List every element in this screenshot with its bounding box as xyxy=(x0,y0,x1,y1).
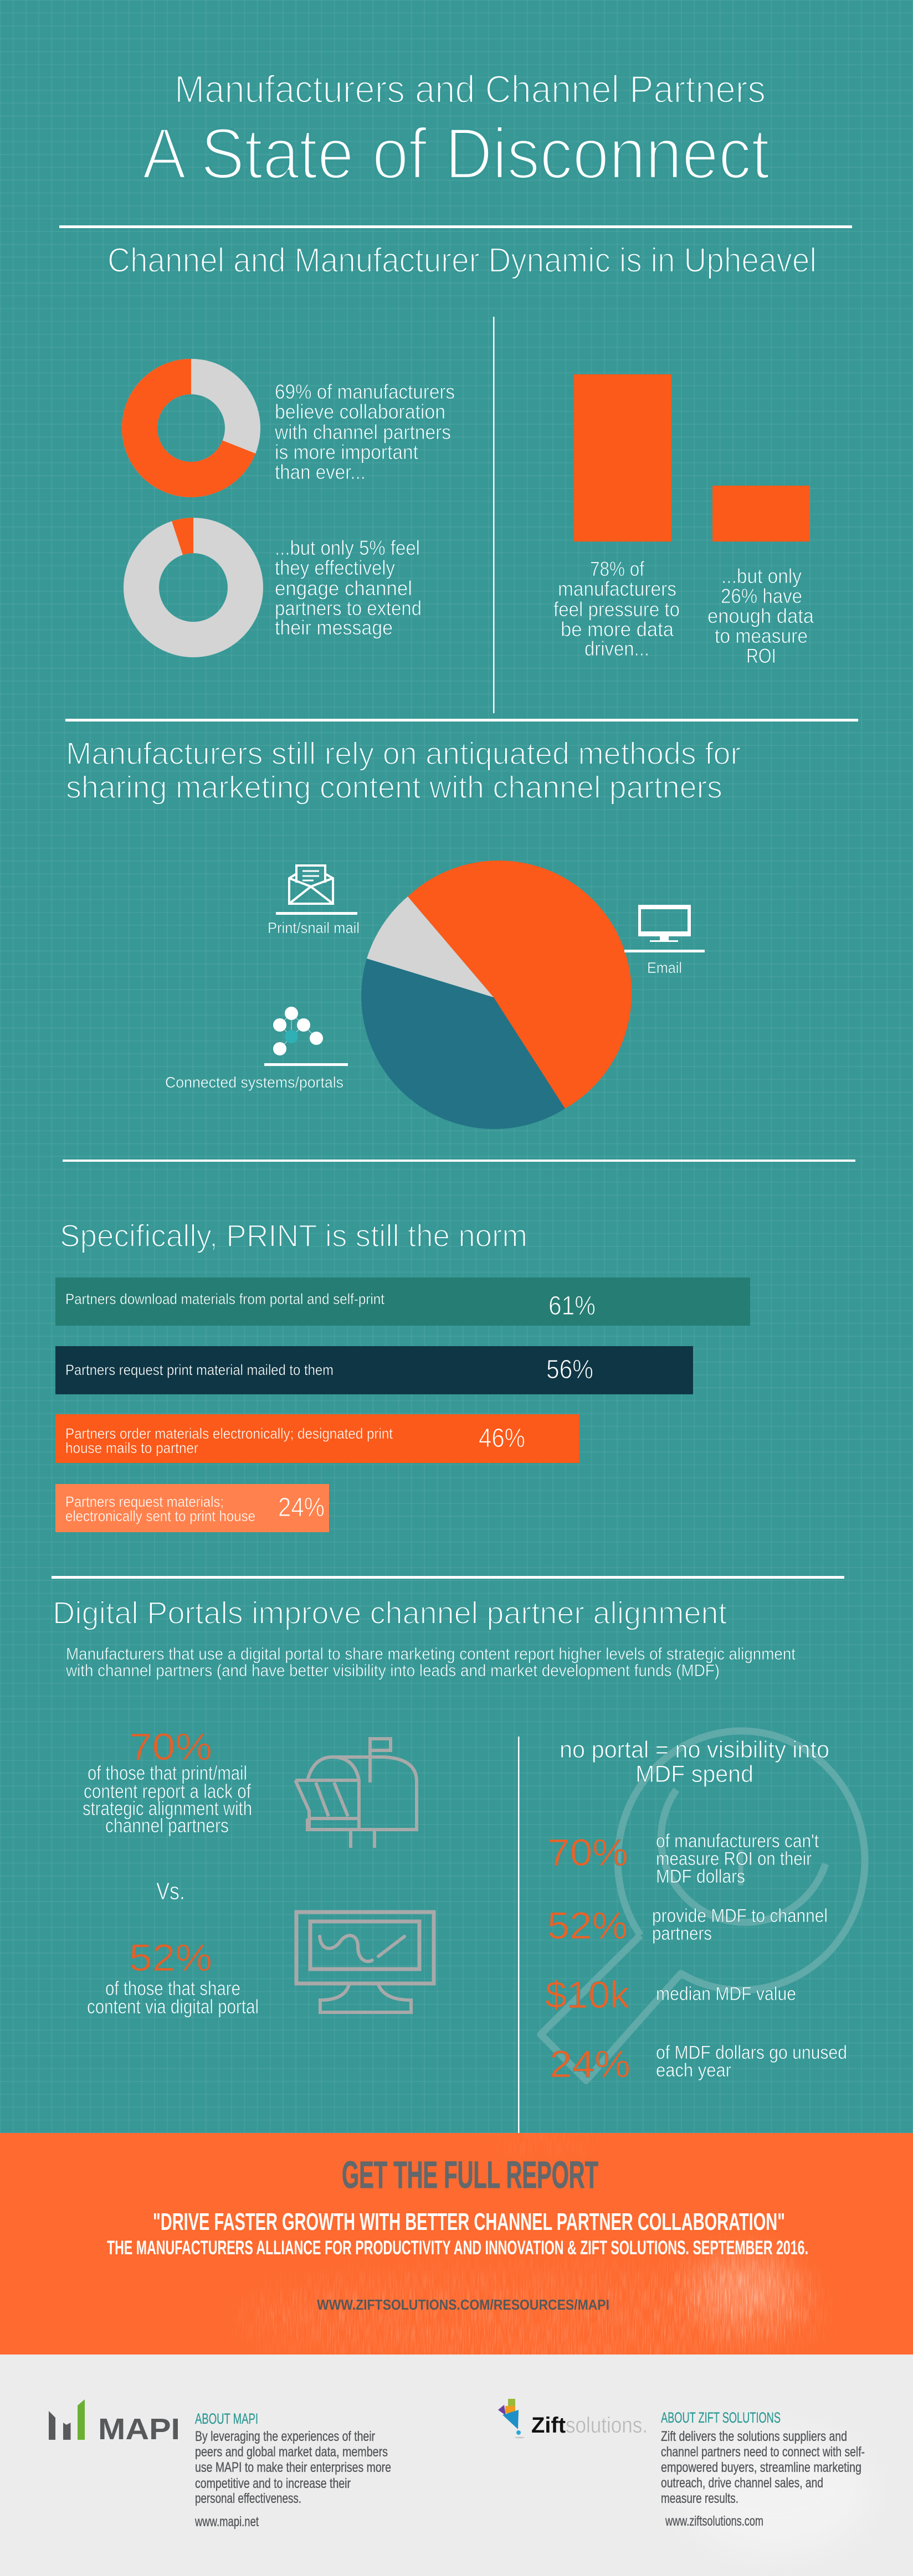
text: only 26 percent xyxy=(707,565,814,667)
text: 78 percent of manufacturers xyxy=(553,558,680,660)
text: about Zift solutions: ABOUT ZIFT SOLUTIONS xyxy=(661,2409,781,2426)
bar: print house mails 46 percent: 46% xyxy=(479,1424,525,1453)
stat: 10k median MDF: $10k xyxy=(545,1974,630,2016)
stat: 52 percent provide MDF xyxy=(547,1904,828,1947)
text: 69 percent of manufacturers: is more important xyxy=(275,441,419,463)
text: 69 percent of manufacturers xyxy=(274,380,455,483)
pie chart: content sharing methods xyxy=(361,861,632,1129)
label: print and snail mail: Print/snail mail xyxy=(268,919,360,936)
stat: 70 percent can't measure ROI: measure ROI on their xyxy=(656,1848,812,1869)
text: 78 percent of manufacturers: be more data xyxy=(561,618,674,641)
heading: no portal no visibility: MDF spend xyxy=(635,1761,753,1787)
text: only 26 percent: 26% have xyxy=(721,585,802,607)
stat: 70 percent lack alignment: strategic alignment with xyxy=(83,1797,252,1820)
intro paragraph: with channel partners (and have better visibility into leads and market development funds (MDF) xyxy=(65,1661,720,1680)
logo: MAPI: MAPI xyxy=(98,2413,180,2446)
text: about Zift solutions: Zift delivers the solutions suppliers and xyxy=(661,2429,847,2444)
text: about MAPI: competitive and to increase their xyxy=(195,2476,351,2491)
bar: sent to print house 24 percent: 24% xyxy=(278,1493,325,1522)
bar: download and self-print 61 percent xyxy=(55,1277,750,1326)
text: 69 percent of manufacturers: 69% of manufacturers xyxy=(275,380,455,403)
label: email: Email xyxy=(647,959,682,976)
stat: 52 percent digital portal: 52% xyxy=(129,1936,212,1979)
icon: desktop monitor xyxy=(638,905,691,942)
bar: print house mails 46 percent xyxy=(55,1414,579,1463)
text: about MAPI: use MAPI to make their enterprises more xyxy=(195,2460,391,2475)
text: about Zift solutions: www.ziftsolutions.com xyxy=(665,2513,763,2529)
stat: 52 percent provide MDF: 52% xyxy=(547,1904,628,1947)
heading: antiquated methods xyxy=(66,736,741,805)
text: only 5 percent: they effectively xyxy=(275,557,395,579)
text: only 5 percent: ...but only 5% feel xyxy=(275,537,420,559)
text: 78 percent of manufacturers: driven... xyxy=(584,637,649,660)
text: about MAPI: ABOUT MAPI xyxy=(195,2410,258,2427)
logo: Zift solutions: solutions. xyxy=(566,2413,648,2438)
icon: connected nodes xyxy=(273,1007,323,1055)
text: 78 percent of manufacturers: manufacturers xyxy=(558,578,676,600)
stat: 24 percent unused: 24% xyxy=(550,2043,630,2085)
donut chart: 5 percent xyxy=(141,535,245,640)
text: about Zift solutions xyxy=(661,2409,865,2529)
text: versus: Vs. xyxy=(156,1878,185,1905)
text: only 26 percent: ROI xyxy=(746,645,776,667)
heading: antiquated methods: Manufacturers still rely on antiquated methods for xyxy=(66,736,741,771)
bar: mailed print 56 percent: Partners request print material mailed to them xyxy=(65,1362,334,1378)
text: only 26 percent: to measure xyxy=(715,625,808,647)
stat: 52 percent provide MDF: partners xyxy=(652,1923,712,1944)
bar: sent to print house 24 percent: electronically sent to print house xyxy=(65,1508,255,1524)
report url: WWW.ZIFTSOLUTIONS.COM/RESOURCES/MAPI xyxy=(317,2296,609,2313)
stat: 52 percent digital portal: of those that share xyxy=(105,1977,240,2000)
stat: 10k median MDF: median MDF value xyxy=(656,1983,796,2005)
text: about MAPI xyxy=(194,2410,391,2529)
text: only 26 percent: ...but only xyxy=(721,565,802,588)
label: connected systems and portals: Connected systems/portals xyxy=(165,1074,343,1091)
heading: print is still the norm: Specifically, PRINT is still the norm xyxy=(60,1218,527,1254)
heading: antiquated methods: sharing marketing content with channel partners xyxy=(66,770,722,805)
bar: download and self-print 61 percent: 61% xyxy=(548,1291,596,1321)
stat: 70 percent can't measure ROI: MDF dollars xyxy=(656,1866,745,1887)
icon: envelope xyxy=(289,865,333,904)
donut chart: 69 percent xyxy=(140,377,243,480)
heading: channel and manufacturer dynamic: Channel and Manufacturer Dynamic is in Upheavel xyxy=(107,241,817,280)
text: about Zift solutions: outreach, drive channel sales, and xyxy=(661,2475,823,2491)
stat: 70 percent lack alignment: of those that print/mail xyxy=(88,1761,247,1784)
bar: print house mails 46 percent: Partners order materials electronically; designated print xyxy=(65,1425,393,1442)
text: 78 percent of manufacturers: 78% of xyxy=(590,558,645,580)
text: only 5 percent: their message xyxy=(275,616,393,639)
text: 69 percent of manufacturers: believe collaboration xyxy=(275,400,445,423)
stat: 52 percent digital portal: content via digital portal xyxy=(87,1995,259,2018)
stat: 10k median MDF xyxy=(545,1974,796,2016)
text: only 26 percent: enough data xyxy=(707,605,814,627)
stat: 70 percent can't measure ROI: of manufacturers can't xyxy=(656,1831,819,1852)
panel: footer about section xyxy=(0,2355,913,2576)
stat: 52 percent provide MDF: provide MDF to channel xyxy=(652,1905,828,1926)
panel: get the full report xyxy=(0,2133,913,2355)
intro paragraph: Manufacturers that use a digital portal to share marketing content report higher levels of strategic alignment xyxy=(66,1644,796,1663)
text: 69 percent of manufacturers: with channel partners xyxy=(274,421,451,444)
logo: Zift solutions xyxy=(498,2399,648,2439)
bar: sent to print house 24 percent: Partners request materials; xyxy=(65,1493,224,1510)
bar chart: data driven versus ROI xyxy=(574,374,810,542)
text: 69 percent of manufacturers: than ever... xyxy=(275,461,366,483)
stat: 70 percent can't measure ROI: 70% xyxy=(547,1831,628,1874)
stat: 70 percent lack alignment: content report a lack of xyxy=(84,1780,252,1802)
stat: 52 percent digital portal xyxy=(87,1936,259,2018)
text: only 5 percent xyxy=(275,537,422,639)
stat: 70 percent lack alignment xyxy=(83,1725,252,1837)
text: about Zift solutions: measure results. xyxy=(661,2491,738,2506)
text: only 5 percent: partners to extend xyxy=(275,597,422,620)
title xyxy=(142,68,770,194)
bar: download and self-print 61 percent: Partners download materials from portal and self-print xyxy=(65,1291,384,1307)
icon: magnifying glass watermark xyxy=(541,1731,865,2080)
title line one: Manufacturers and Channel Partners xyxy=(175,68,766,111)
stat: 70 percent can't measure ROI xyxy=(547,1831,819,1887)
stat: 24 percent unused xyxy=(550,2042,847,2085)
text: about MAPI: www.mapi.net xyxy=(194,2514,259,2529)
logo: Zift solutions: Zift xyxy=(531,2413,566,2438)
stat: 70 percent lack alignment: 70% xyxy=(129,1725,212,1768)
text: about MAPI: peers and global market data, members xyxy=(195,2444,388,2460)
text: about MAPI: personal effectiveness. xyxy=(195,2491,301,2506)
heading: no portal no visibility xyxy=(560,1737,829,1787)
heading: digital portals: Digital Portals improve channel partner alignment xyxy=(53,1595,727,1631)
icon: mailbox xyxy=(295,1739,417,1848)
bar: mailed print 56 percent xyxy=(55,1346,693,1394)
heading: no portal no visibility: no portal = no visibility into xyxy=(560,1737,829,1763)
icon: computer with squiggle xyxy=(296,1912,434,2012)
stat: 70 percent lack alignment: channel partners xyxy=(105,1814,229,1837)
bar: mailed print 56 percent: 56% xyxy=(546,1355,593,1384)
bar: print house mails 46 percent: house mails to partner xyxy=(65,1440,198,1456)
title line two: A State of Disconnect xyxy=(142,113,770,194)
stat: 24 percent unused: of MDF dollars go unused xyxy=(656,2042,847,2063)
call to action heading: GET THE FULL REPORT xyxy=(342,2153,598,2196)
text: only 5 percent: engage channel xyxy=(275,577,412,600)
text: about MAPI: By leveraging the experiences of their xyxy=(195,2429,375,2444)
bar: sent to print house 24 percent xyxy=(55,1484,329,1532)
logo: MAPI xyxy=(49,2399,180,2446)
stat: 24 percent unused: each year xyxy=(656,2060,731,2081)
text: 78 percent of manufacturers: feel pressure to xyxy=(553,598,680,621)
intro paragraph xyxy=(65,1644,796,1680)
text: about Zift solutions: empowered buyers, streamline marketing xyxy=(661,2460,861,2475)
